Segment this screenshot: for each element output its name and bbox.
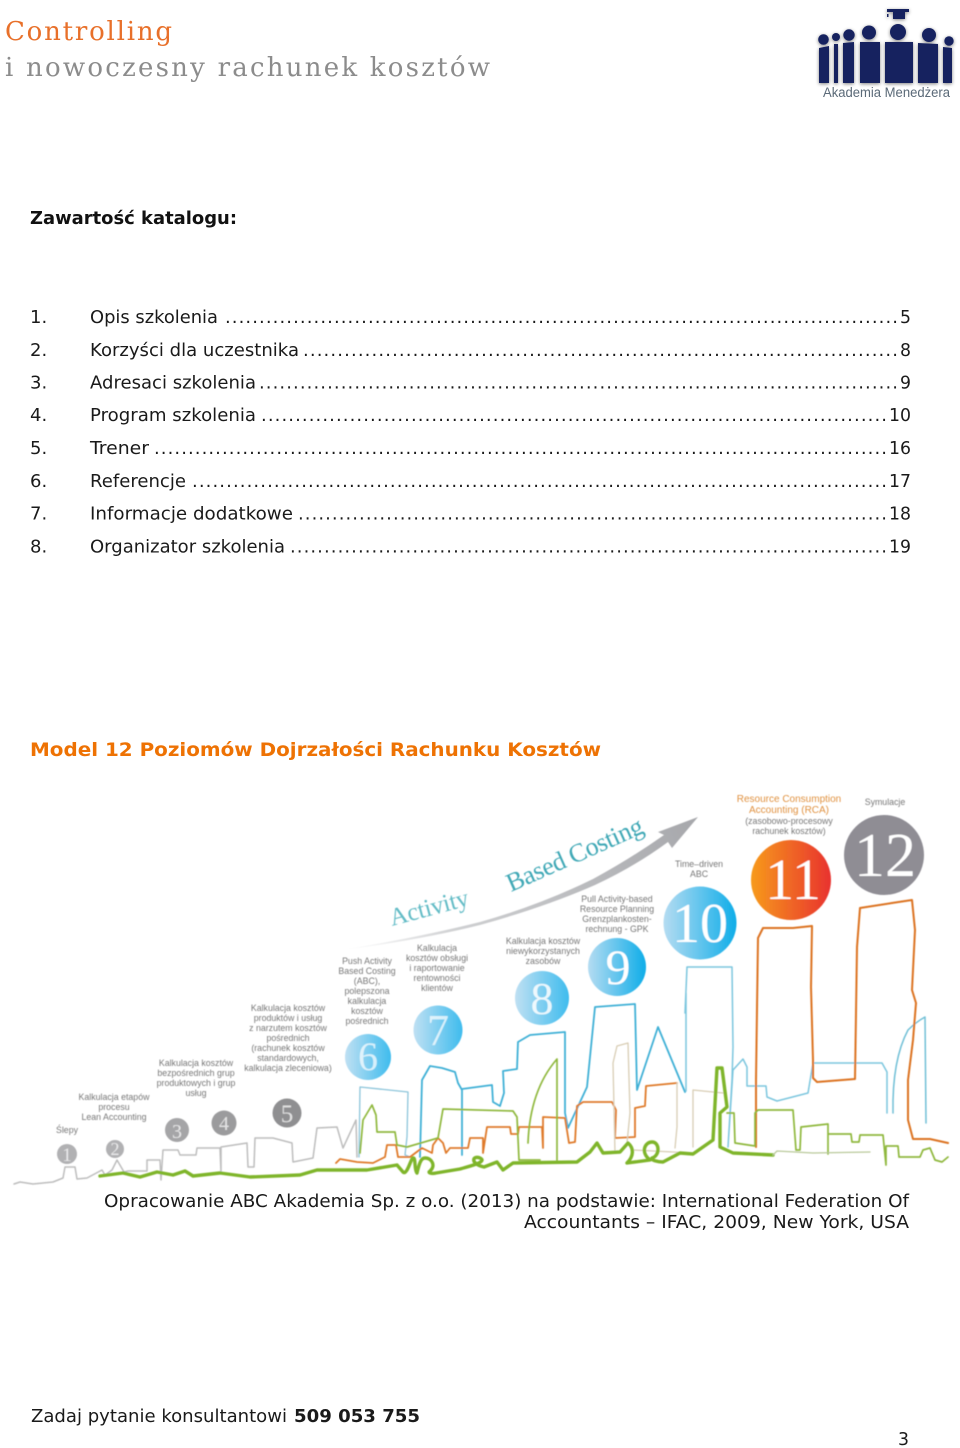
toc row 7: ....................................................................................... <box>298 504 887 524</box>
skyline: faded tan buildings <box>613 1043 723 1153</box>
toc row 2: 8 <box>900 340 911 361</box>
level 5: pośrednich <box>266 1033 310 1043</box>
skyline: thick green ground line <box>100 1068 773 1177</box>
level 7: kosztów obsługi <box>406 953 468 963</box>
level 2 <box>79 1092 150 1159</box>
level 6: 6 <box>358 1034 378 1079</box>
level 9: Grenzplankosten- <box>582 914 652 924</box>
level 11: rachunek kosztów) <box>752 826 826 836</box>
toc row 1: 5 <box>900 307 911 328</box>
footer: consultant phone: Zadaj pytanie konsultantowi <box>31 1406 287 1427</box>
footer: consultant phone: 509 053 755 <box>294 1406 420 1427</box>
level 6: kosztów <box>351 1006 384 1016</box>
level 8: Kalkulacja kosztów <box>506 936 581 946</box>
level 7: 7 <box>427 1006 449 1055</box>
level 1: 1 <box>62 1145 72 1166</box>
toc row 1: 1. <box>30 307 47 328</box>
toc row 2: Korzyści dla uczestnika <box>90 340 299 361</box>
level 5: z narzutem kosztów <box>249 1023 328 1033</box>
level 6: Push Activity <box>342 956 393 966</box>
level 2: Kalkulacja etapów <box>79 1092 150 1102</box>
level 4 <box>212 1110 236 1136</box>
level 4: 4 <box>219 1113 229 1135</box>
level 11 <box>737 794 841 920</box>
level 7: rentowności <box>414 973 461 983</box>
skyline: grey buildings <box>14 1120 357 1184</box>
level 3: 3 <box>172 1121 182 1143</box>
level 1: Ślepy <box>56 1124 79 1135</box>
level 8: 8 <box>530 973 554 1024</box>
skyline: orange towers 11 and 12 <box>756 900 948 1147</box>
level 8 <box>506 936 581 1025</box>
toc row 5: ............................................................................................................ <box>154 438 887 459</box>
toc row 7 <box>30 504 911 524</box>
level 2: procesu <box>98 1102 130 1112</box>
arrow: activity based costing trend <box>342 817 698 950</box>
level 6: kalkulacja <box>348 996 386 1006</box>
source caption <box>104 1191 910 1233</box>
level 5: 5 <box>281 1101 293 1128</box>
skyline: thin green ground line <box>773 1151 870 1155</box>
level 10: Time–driven <box>675 859 723 869</box>
toc row 5: 16 <box>889 438 911 459</box>
level 3 <box>157 1058 235 1143</box>
toc row 7: 7. <box>30 504 47 524</box>
toc row 6: 17 <box>889 471 911 492</box>
toc row 8: ........................................................................................ <box>290 536 887 558</box>
level 7: i raportowanie <box>409 963 465 973</box>
level 3: Kalkulacja kosztów <box>159 1058 234 1068</box>
arrow caption: Activity: Activity <box>387 885 472 932</box>
skyline: low orange buildings <box>336 1083 677 1163</box>
toc row 8: 19 <box>889 536 911 558</box>
toc row 3: 3. <box>30 372 47 394</box>
level 11: Resource Consumption <box>737 794 841 805</box>
title: Controlling <box>5 17 172 47</box>
title: i nowoczesny rachunek kosztów <box>5 53 490 83</box>
toc row 6: Referencje <box>90 471 186 492</box>
level 6: Based Costing <box>338 966 396 976</box>
toc row 7: 18 <box>889 504 911 524</box>
chart: maturity skyline <box>14 794 948 1184</box>
skyline: right blue tower <box>893 1017 926 1123</box>
level 8: niewykorzystanych <box>506 946 580 956</box>
level 12: Symulacje <box>865 797 905 807</box>
toc row 8 <box>30 536 911 558</box>
level 12: 12 <box>854 822 916 890</box>
level 2: 2 <box>110 1139 120 1159</box>
level 7: Kalkulacja <box>417 943 457 953</box>
footer: consultant phone <box>31 1406 420 1427</box>
toc row 6: ...................................................................................................... <box>192 471 887 492</box>
level 3: bezpośrednich grup <box>157 1068 235 1078</box>
toc row 2: ....................................................................................... <box>303 340 898 361</box>
arrow caption: Based Costing: Based Costing <box>502 811 648 897</box>
logo: Akademia Menedżera <box>818 9 954 100</box>
toc row 8: Organizator szkolenia <box>90 536 285 558</box>
toc row 5: 5. <box>30 438 47 459</box>
level 8: zasobów <box>526 956 561 966</box>
toc row 4: Program szkolenia <box>90 405 256 426</box>
heading: maturity model: Model 12 Poziomów Dojrzałości Rachunku Kosztów <box>30 739 601 761</box>
toc row 4: 4. <box>30 405 47 426</box>
level 11: 11 <box>765 847 821 912</box>
toc row 8: 8. <box>30 536 47 558</box>
heading: catalogue contents: Zawartość katalogu: <box>30 208 237 229</box>
level 6 <box>338 956 396 1080</box>
level 5: Kalkulacja kosztów <box>251 1003 326 1013</box>
level 11: Accounting (RCA) <box>749 805 829 816</box>
toc row 2: 2. <box>30 340 47 361</box>
level 7: klientów <box>421 983 454 993</box>
toc row 4: 10 <box>889 405 911 426</box>
source caption: Accountants – IFAC, 2009, New York, USA <box>524 1212 910 1233</box>
level 10: 10 <box>672 893 728 955</box>
level 5: (rachunek kosztów <box>251 1043 325 1053</box>
level 12 <box>844 797 924 895</box>
table of contents <box>30 307 911 558</box>
level 11: (zasobowo-procesowy <box>745 816 833 826</box>
level 5 <box>244 1003 332 1128</box>
level 5: kalkulacja zleceniowa) <box>244 1063 332 1073</box>
toc row 6: 6. <box>30 471 47 492</box>
toc row 3: 9 <box>900 372 911 394</box>
level 9 <box>580 894 654 996</box>
toc row 2 <box>30 340 911 361</box>
logo: Akademia Menedżera: Akademia Menedżera <box>823 85 950 100</box>
level 1 <box>56 1124 79 1166</box>
skyline: building 10 <box>685 967 887 1147</box>
toc row 3: Adresaci szkolenia <box>90 372 256 394</box>
skyline: thin green buildings <box>360 1059 948 1165</box>
level 9: rechnung - GPK <box>585 924 649 934</box>
toc row 5: Trener <box>89 438 150 459</box>
toc row 4: ............................................................................................ <box>261 405 887 426</box>
toc row 1: Opis szkolenia <box>90 307 218 328</box>
toc row 3: .............................................................................................. <box>259 372 898 394</box>
level 6: (ABC), <box>354 976 380 986</box>
level 6: pośrednich <box>345 1016 389 1026</box>
level 9: Resource Planning <box>580 904 654 914</box>
level 10: ABC <box>690 869 709 879</box>
level 6: polepszona <box>344 986 390 996</box>
level 3: produktowych i grup <box>157 1078 235 1088</box>
source caption: Opracowanie ABC Akademia Sp. z o.o. (2013) na podstawie: International Federation Of <box>104 1191 910 1212</box>
toc row 7: Informacje dodatkowe <box>90 504 293 524</box>
level 3: usług <box>185 1088 207 1098</box>
level 7 <box>406 943 468 1055</box>
level 9: Pull Activity-based <box>581 894 653 904</box>
skyline: light blue building 6 <box>359 1087 410 1157</box>
title <box>5 17 490 83</box>
toc row 1: ................................................................................................... <box>225 307 898 328</box>
level 2: Lean Accounting <box>81 1112 147 1122</box>
level 5: standardowych, <box>257 1053 319 1063</box>
skyline: blue buildings <box>420 1004 685 1157</box>
level 10 <box>664 859 736 960</box>
level 5: produktów i usług <box>254 1013 322 1023</box>
level 9: 9 <box>606 939 630 995</box>
